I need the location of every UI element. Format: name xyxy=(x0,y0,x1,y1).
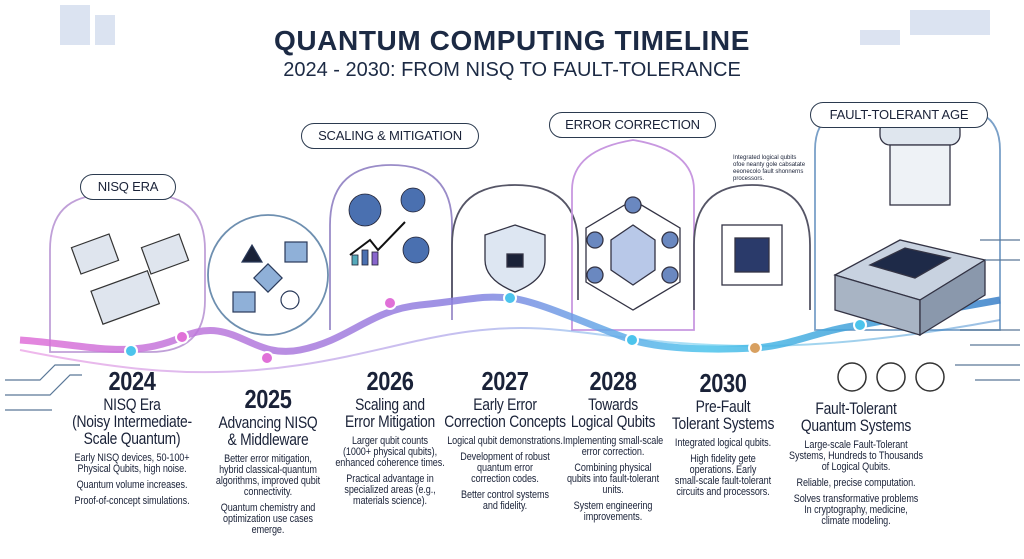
column 2026 xyxy=(335,366,445,507)
column 2030: Integrated logical qubits. xyxy=(675,437,771,449)
column fault tolerant: Solves transformative problems xyxy=(794,493,918,505)
column 2028: Combining physical xyxy=(574,462,652,474)
pill: NISQ ERA: NISQ ERA xyxy=(98,179,158,194)
pill: error correction: ERROR CORRECTION xyxy=(565,117,700,132)
column 2028: 2028 xyxy=(590,366,636,396)
column 2026: Practical advantage in xyxy=(346,473,434,485)
column 2024 xyxy=(72,366,192,507)
pill: error correction xyxy=(549,112,716,138)
wave xyxy=(20,297,1000,351)
icon: circuit traces xyxy=(5,240,1020,410)
icon: logical qubits xyxy=(586,197,680,310)
column 2025: optimization use cases xyxy=(223,513,313,525)
column 2028: System engineering xyxy=(574,500,652,512)
title: QUANTUM COMPUTING TIMELINE xyxy=(274,25,750,56)
pill: scaling xyxy=(301,123,479,149)
column 2024: (Noisy Intermediate- xyxy=(72,413,192,431)
column 2026: enhanced coherence times. xyxy=(335,457,445,469)
column 2024: Early NISQ devices, 50-100+ xyxy=(75,452,189,464)
column 2028: error correction. xyxy=(582,446,644,458)
column 2028: Implementing small-scale xyxy=(563,435,663,447)
column 2025: 2025 xyxy=(245,384,291,414)
panel outlines xyxy=(50,110,1000,352)
column 2027: Correction Concepts xyxy=(444,413,566,431)
column fault tolerant: Systems, Hundreds to Thousands xyxy=(789,450,923,462)
column 2027: Better control systems xyxy=(461,489,549,501)
column 2027: Development of robust xyxy=(460,451,550,463)
column 2028: Logical Qubits xyxy=(571,413,655,431)
icon row: fault tolerant xyxy=(838,363,944,391)
column 2025: Advancing NISQ xyxy=(219,414,317,432)
column 2028: units. xyxy=(602,484,624,496)
column 2027: Early Error xyxy=(473,396,537,414)
column 2026: Scaling and xyxy=(355,396,425,414)
column 2030: High fidelity gete xyxy=(690,453,756,465)
column 2024: Physical Qubits, high noise. xyxy=(77,463,187,475)
pill: fault tolerant age xyxy=(810,102,988,128)
column 2025 xyxy=(216,384,320,536)
column 2030 xyxy=(672,368,774,498)
column 2030: operations. Early xyxy=(690,464,756,476)
column 2028: Towards xyxy=(588,396,638,414)
column fault tolerant xyxy=(789,400,923,527)
column 2028: qubits into fault-tolerant xyxy=(567,473,659,485)
pill: scaling: SCALING & MITIGATION xyxy=(318,128,462,143)
column 2025: emerge. xyxy=(252,524,284,536)
column 2025: algorithms, improved qubit xyxy=(216,475,320,487)
column fault tolerant: Large-scale Fault-Tolerant xyxy=(804,439,908,451)
icon: chips xyxy=(71,234,189,324)
column 2030: circuits and processors. xyxy=(676,486,770,498)
column 2027: Logical qubit demonstrations. xyxy=(447,435,563,447)
pill: NISQ ERA xyxy=(80,174,176,200)
column fault tolerant: Fault-Tolerant xyxy=(815,400,897,418)
column 2026: specialized areas (e.g., xyxy=(344,484,436,496)
column 2024: 2024 xyxy=(109,366,155,396)
column 2028 xyxy=(563,366,663,523)
column 2025: hybrid classical-quantum xyxy=(219,464,317,476)
column 2027: correction codes. xyxy=(471,473,539,485)
column 2024: Proof-of-concept simulations. xyxy=(74,495,190,507)
pill: fault tolerant age: FAULT-TOLERANT AGE xyxy=(830,107,968,122)
column 2026: 2026 xyxy=(367,366,413,396)
column 2026: (1000+ physical qubits), xyxy=(343,446,437,458)
icon: quantum computer xyxy=(835,120,985,335)
column 2027: quantum error xyxy=(477,462,533,474)
column fault tolerant: Reliable, precise computation. xyxy=(797,477,915,489)
icon: shield xyxy=(485,225,545,292)
column 2026: materials science). xyxy=(353,495,427,507)
column 2024: NISQ Era xyxy=(103,396,161,414)
column 2025: connectivity. xyxy=(244,486,292,498)
column 2027: 2027 xyxy=(482,366,528,396)
column fault tolerant: of Logical Qubits. xyxy=(822,461,890,473)
column 2028: improvements. xyxy=(584,511,642,523)
column 2030: Pre-Fault xyxy=(696,398,750,416)
column fault tolerant: In cryptography, medicine, xyxy=(804,504,908,516)
note text: Integrated logical qubits ofoe neanty gole cabsatate eeonecolo fault shonnerns processors. xyxy=(733,155,805,182)
column 2024: Scale Quantum) xyxy=(84,430,180,448)
column 2025: & Middleware xyxy=(228,431,308,449)
column 2030: Tolerant Systems xyxy=(672,415,774,433)
decorative corners xyxy=(60,5,990,45)
column fault tolerant: Quantum Systems xyxy=(801,417,911,435)
column 2025: Better error mitigation, xyxy=(224,453,312,465)
column fault tolerant: climate modeling. xyxy=(821,515,891,527)
icon: mitigation xyxy=(233,242,307,312)
column 2026: Error Mitigation xyxy=(345,413,435,431)
icon: scaling xyxy=(349,188,429,265)
column 2030: small-scale fault-tolerant xyxy=(675,475,771,487)
column 2027: and fidelity. xyxy=(483,500,527,512)
column 2030: 2030 xyxy=(700,368,746,398)
column 2027 xyxy=(444,366,566,512)
column 2026: Larger qubit counts xyxy=(352,435,428,447)
icon: processor xyxy=(722,225,782,285)
column 2024: Quantum volume increases. xyxy=(77,479,187,491)
subtitle: 2024 - 2030: FROM NISQ TO FAULT-TOLERANCE xyxy=(283,59,741,81)
column 2025: Quantum chemistry and xyxy=(221,502,315,514)
